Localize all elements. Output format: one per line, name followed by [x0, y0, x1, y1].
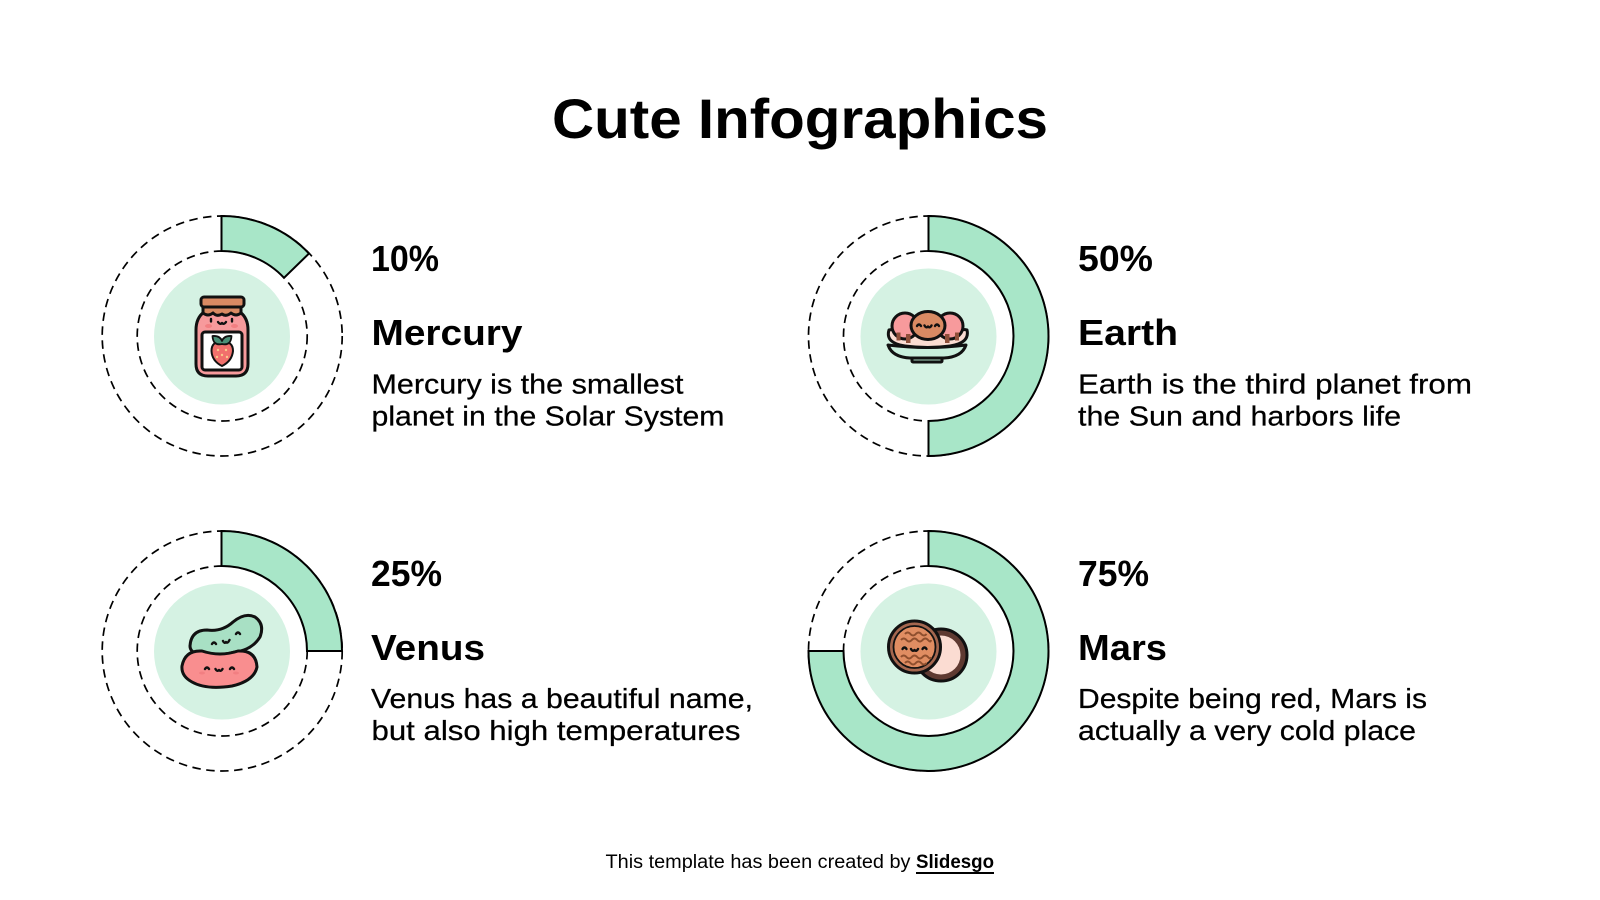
panel: Mercury: [102, 216, 724, 456]
icon: two beans: [182, 615, 262, 687]
name: Mercury: Mercury: [372, 312, 522, 353]
description: Mercury: Mercury is the smallest: [372, 368, 684, 400]
description: Earth: the Sun and harbors life: [1078, 400, 1401, 432]
description: Earth: Earth is the third planet from: [1078, 368, 1472, 400]
panel: Earth: [808, 216, 1472, 456]
description: Venus: but also high temperatures: [372, 715, 740, 746]
name: Mars: Mars: [1078, 627, 1167, 668]
icon: jam jar: [196, 297, 248, 376]
description: Mercury: planet in the Solar System: [372, 400, 724, 432]
panel: Mars: [808, 531, 1427, 771]
description: Mercury: [372, 368, 724, 432]
name: Venus: Venus: [371, 627, 485, 668]
percentage: 50%: 50%: [1078, 238, 1153, 279]
percentage: 25%: 25%: [371, 553, 442, 594]
icon: compact: [888, 621, 967, 681]
title: Cute Infographics: [552, 87, 1048, 150]
description: Earth: [1078, 368, 1472, 432]
progress ring: Mercury 10%: [102, 216, 342, 456]
name: Earth: Earth: [1078, 312, 1178, 353]
description: Venus: [371, 683, 753, 746]
icon: banana split: [888, 312, 967, 362]
progress ring: Venus 25%: [102, 531, 342, 771]
footer credit: This template has been created by: [606, 852, 911, 873]
description: Venus: Venus has a beautiful name,: [371, 683, 753, 714]
progress ring: Earth 50%: [808, 216, 1048, 456]
panel: Venus: [102, 531, 753, 771]
percentage: 75%: 75%: [1078, 553, 1149, 594]
description: Mars: actually a very cold place: [1078, 715, 1416, 746]
percentage: 10%: 10%: [371, 238, 439, 279]
description: Mars: Despite being red, Mars is: [1078, 683, 1427, 714]
progress ring: Mars 75%: [808, 531, 1048, 771]
footer credit: Slidesgo: [916, 852, 994, 873]
description: Mars: [1078, 683, 1427, 746]
